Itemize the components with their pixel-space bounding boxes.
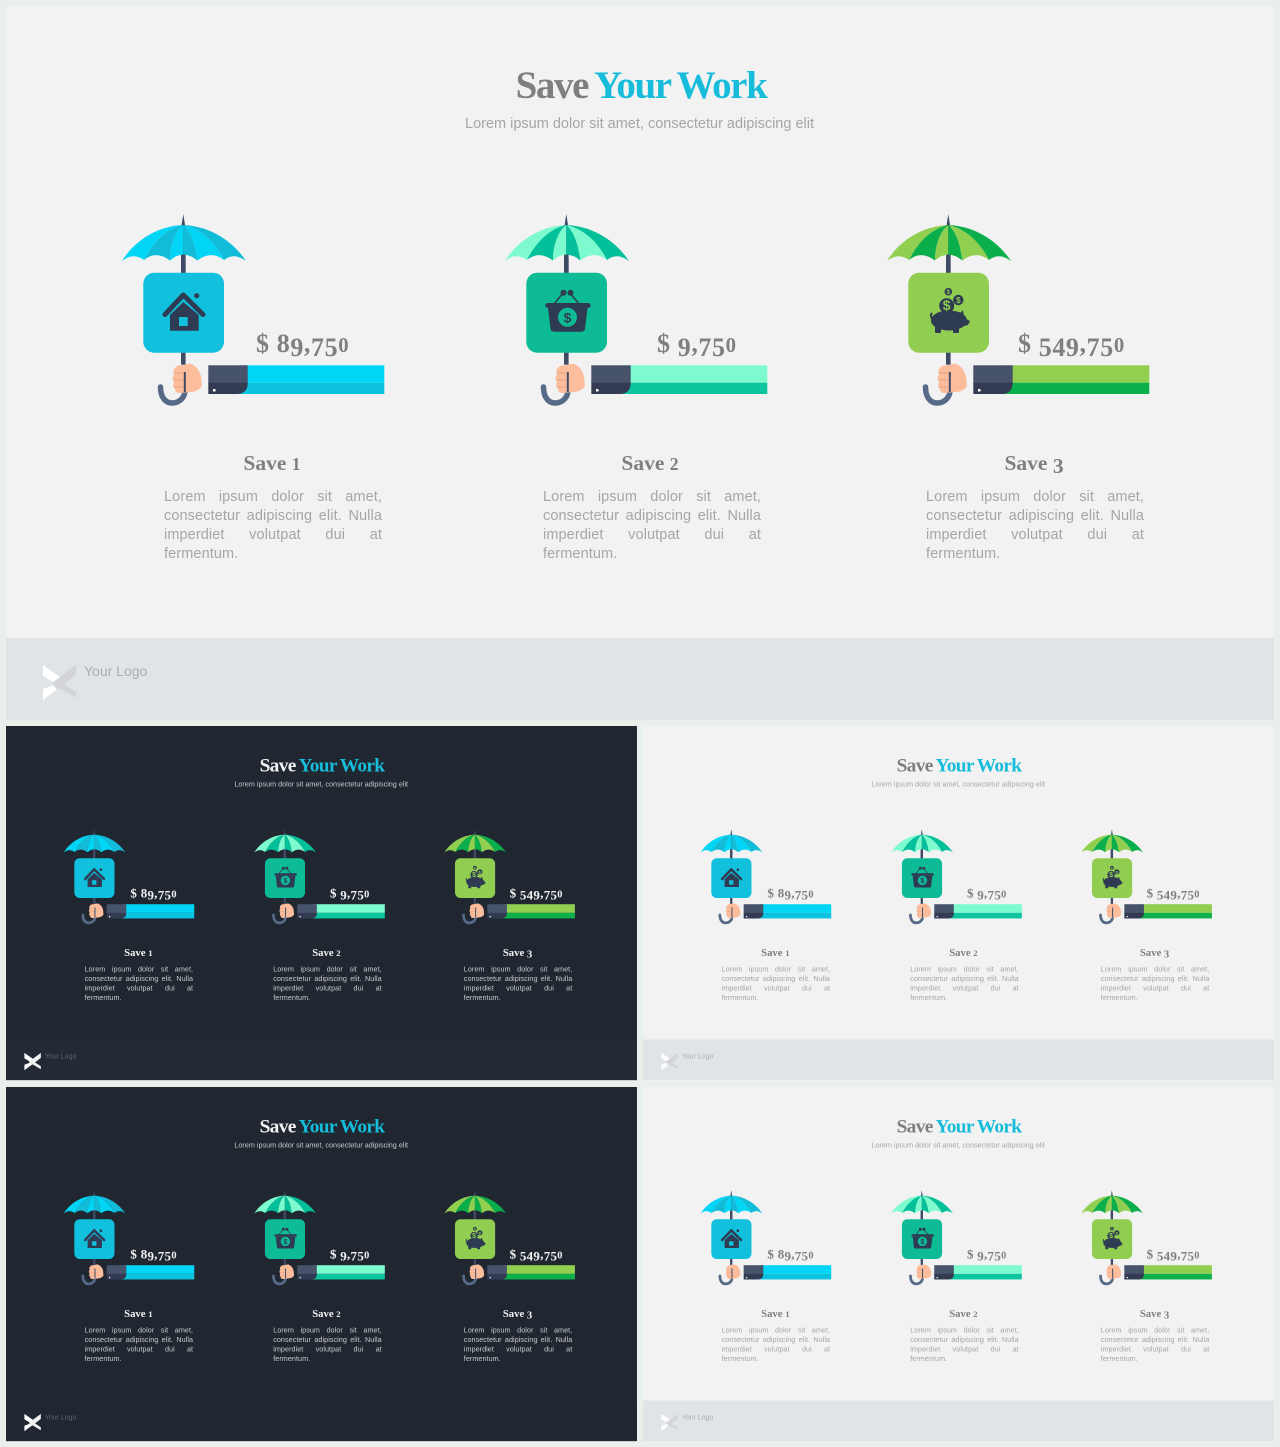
illustration: umbrella basket bbox=[251, 1188, 388, 1287]
text: save 2 bbox=[910, 965, 1019, 1002]
heading: save 2: Save 2 bbox=[621, 451, 679, 475]
footer band bbox=[643, 1400, 1274, 1441]
text: save 1: fermentum. bbox=[85, 994, 122, 1002]
subtitle: Lorem ipsum dolor sit amet, consectetur adipiscing elit bbox=[465, 116, 814, 132]
heading: save 3: Save 3 bbox=[503, 947, 532, 960]
value: save 2: $ 9,750 bbox=[330, 886, 370, 903]
text: save 1: consectetur adipiscing elit. Nulla bbox=[164, 508, 382, 524]
text: save 2: fermentum. bbox=[273, 994, 310, 1002]
text: save 3: Lorem ipsum dolor sit amet, bbox=[464, 1326, 572, 1334]
value: save 3: $ 549,750 bbox=[1018, 329, 1125, 362]
text: save 2: consectetur adipiscing elit. Nulla bbox=[910, 975, 1019, 983]
text: save 3: Lorem ipsum dolor sit amet, bbox=[1101, 965, 1209, 973]
value: save 2: $ 9,750 bbox=[330, 1247, 370, 1264]
text: save 1: fermentum. bbox=[164, 546, 238, 562]
icon: logo bbox=[661, 1052, 679, 1071]
logo text: Your Logo bbox=[84, 663, 147, 679]
illustration: umbrella piggy bank: $ bbox=[1116, 869, 1119, 874]
illustration: umbrella piggy bank bbox=[444, 830, 575, 924]
illustration: umbrella basket bbox=[891, 829, 1022, 924]
heading: save 2: Save 2 bbox=[312, 947, 341, 959]
panel: main light slide bbox=[6, 6, 1274, 720]
value: save 3: $ 549,750 bbox=[1147, 886, 1200, 903]
text: save 3: fermentum. bbox=[926, 546, 1000, 562]
illustration: umbrella piggy bank: $ bbox=[1111, 866, 1113, 870]
text: save 1: fermentum. bbox=[85, 1355, 122, 1363]
illustration: umbrella house bbox=[122, 214, 384, 406]
text: save 2: imperdiet volutpat dui at bbox=[543, 526, 761, 542]
value: save 2: $ 9,750 bbox=[967, 1247, 1007, 1264]
text: save 3 bbox=[464, 1326, 572, 1364]
illustration: umbrella piggy bank: $ bbox=[472, 872, 476, 879]
text: save 1: consectetur adipiscing elit. Nulla bbox=[722, 1336, 830, 1344]
text: save 3: Lorem ipsum dolor sit amet, bbox=[464, 965, 572, 973]
text: save 2: Lorem ipsum dolor sit amet, bbox=[273, 1326, 382, 1334]
icon: logo bbox=[24, 1413, 42, 1432]
value: save 1: $ 89,750 bbox=[256, 329, 349, 362]
text: save 3 bbox=[926, 488, 1144, 562]
panel: dark slide bottom bbox=[6, 1087, 637, 1441]
footer band bbox=[643, 1039, 1274, 1080]
text: save 2: imperdiet volutpat dui at bbox=[273, 984, 382, 992]
text: save 3: imperdiet volutpat dui at bbox=[1101, 1345, 1209, 1353]
text: save 3: consectetur adipiscing elit. Nulla bbox=[1101, 975, 1209, 983]
text: save 1 bbox=[84, 965, 193, 1002]
text: save 1: Lorem ipsum dolor sit amet, bbox=[85, 1326, 193, 1334]
text: save 3: imperdiet volutpat dui at bbox=[1101, 984, 1209, 992]
heading: save 2: Save 2 bbox=[949, 1308, 978, 1320]
subtitle: Lorem ipsum dolor sit amet, consectetur adipiscing elit bbox=[871, 1142, 1045, 1149]
panel: light slide top bbox=[643, 726, 1274, 1080]
text: save 3: Lorem ipsum dolor sit amet, bbox=[926, 488, 1144, 504]
illustration: umbrella piggy bank: $ bbox=[472, 1233, 476, 1240]
illustration: umbrella piggy bank: $ bbox=[479, 869, 482, 874]
heading: save 3: Save 3 bbox=[1140, 947, 1169, 960]
heading: Save Your Work bbox=[260, 755, 384, 776]
text: save 1: consectetur adipiscing elit. Nulla bbox=[85, 1336, 193, 1344]
text: save 1: Lorem ipsum dolor sit amet, bbox=[85, 965, 193, 973]
illustration: umbrella basket bbox=[505, 214, 768, 406]
heading: Save Your Work bbox=[897, 755, 1021, 776]
text: save 3: imperdiet volutpat dui at bbox=[464, 1345, 572, 1353]
value: save 3: $ 549,750 bbox=[510, 1247, 563, 1264]
heading: Save Your Work bbox=[516, 64, 766, 106]
text: save 3: consectetur adipiscing elit. Nulla bbox=[926, 508, 1144, 524]
heading: save 2: Save 2 bbox=[312, 1308, 341, 1320]
text: save 2: consectetur adipiscing elit. Nulla bbox=[273, 1336, 382, 1344]
text: save 2: consectetur adipiscing elit. Nulla bbox=[910, 1336, 1019, 1344]
text: save 1: Lorem ipsum dolor sit amet, bbox=[722, 965, 830, 973]
heading: save 1: Save 1 bbox=[243, 451, 301, 475]
logo text: Your Logo bbox=[682, 1052, 713, 1060]
text: save 2 bbox=[910, 1326, 1019, 1364]
illustration: umbrella piggy bank: $ bbox=[479, 1230, 482, 1235]
text: save 1: consectetur adipiscing elit. Nulla bbox=[85, 975, 193, 983]
footer band bbox=[6, 1400, 637, 1441]
illustration: umbrella piggy bank bbox=[887, 214, 1150, 406]
text: save 2: Lorem ipsum dolor sit amet, bbox=[273, 965, 382, 973]
text: save 1: Lorem ipsum dolor sit amet, bbox=[164, 488, 382, 504]
text: save 1: Lorem ipsum dolor sit amet, bbox=[722, 1326, 830, 1334]
text: save 3: consectetur adipiscing elit. Nulla bbox=[464, 975, 572, 983]
heading: save 3: Save 3 bbox=[1004, 451, 1064, 478]
illustration: umbrella basket: $ bbox=[283, 1239, 287, 1246]
value: save 1: $ 89,750 bbox=[130, 1247, 177, 1264]
illustration: umbrella basket: $ bbox=[920, 1239, 924, 1246]
illustration: umbrella basket bbox=[888, 1188, 1025, 1287]
illustration: umbrella basket: $ bbox=[283, 878, 287, 885]
text: save 1: imperdiet volutpat dui at bbox=[85, 1345, 193, 1353]
heading: save 3: Save 3 bbox=[1140, 1308, 1169, 1321]
heading: Save Your Work bbox=[897, 1116, 1021, 1137]
text: save 1: imperdiet volutpat dui at bbox=[85, 984, 193, 992]
icon: logo bbox=[661, 1413, 679, 1432]
illustration: umbrella piggy bank: $ bbox=[943, 297, 951, 313]
logo text: Your Logo bbox=[45, 1413, 76, 1421]
value: save 3: $ 549,750 bbox=[1147, 1247, 1200, 1264]
illustration: umbrella piggy bank bbox=[1082, 829, 1212, 924]
text: save 3: consectetur adipiscing elit. Nulla bbox=[464, 1336, 572, 1344]
panel: light slide bottom bbox=[643, 1087, 1274, 1441]
text: save 1 bbox=[85, 1326, 193, 1364]
illustration: umbrella piggy bank bbox=[441, 1188, 578, 1287]
illustration: umbrella piggy bank: $ bbox=[1109, 1233, 1113, 1240]
heading: save 2: Save 2 bbox=[949, 947, 978, 959]
text: save 3: imperdiet volutpat dui at bbox=[464, 984, 572, 992]
text: save 1: imperdiet volutpat dui at bbox=[722, 1345, 830, 1353]
text: save 1: imperdiet volutpat dui at bbox=[164, 526, 382, 542]
value: save 1: $ 89,750 bbox=[767, 886, 814, 903]
logo text: Your Logo bbox=[682, 1413, 713, 1421]
value: save 2: $ 9,750 bbox=[967, 886, 1007, 903]
illustration: umbrella basket bbox=[254, 830, 385, 924]
text: save 2: consectetur adipiscing elit. Nulla bbox=[543, 508, 761, 524]
illustration: umbrella piggy bank: $ bbox=[1116, 1230, 1119, 1235]
text: save 2: imperdiet volutpat dui at bbox=[273, 1345, 382, 1353]
text: save 3: Lorem ipsum dolor sit amet, bbox=[1101, 1326, 1209, 1334]
text: save 1 bbox=[164, 488, 382, 562]
subtitle: Lorem ipsum dolor sit amet, consectetur adipiscing elit bbox=[234, 1142, 408, 1149]
text: save 1 bbox=[722, 965, 830, 1002]
illustration: umbrella house bbox=[700, 829, 832, 924]
logo text: Your Logo bbox=[45, 1052, 76, 1060]
text: save 1: imperdiet volutpat dui at bbox=[722, 984, 830, 992]
illustration: umbrella piggy bank: $ bbox=[1111, 1227, 1113, 1231]
footer band bbox=[6, 638, 1274, 720]
heading: save 1: Save 1 bbox=[761, 947, 790, 959]
text: save 3: fermentum. bbox=[464, 1355, 501, 1363]
text: save 2 bbox=[273, 965, 382, 1002]
text: save 2: Lorem ipsum dolor sit amet, bbox=[910, 1326, 1019, 1334]
illustration: umbrella piggy bank: $ bbox=[474, 1227, 476, 1231]
illustration: umbrella house bbox=[60, 1188, 197, 1287]
text: save 2: imperdiet volutpat dui at bbox=[910, 1345, 1019, 1353]
panel: dark slide top bbox=[6, 726, 637, 1080]
heading: Save Your Work bbox=[260, 1116, 384, 1137]
text: save 3: consectetur adipiscing elit. Nulla bbox=[1101, 1336, 1209, 1344]
text: save 2: Lorem ipsum dolor sit amet, bbox=[543, 488, 761, 504]
text: save 1 bbox=[722, 1326, 830, 1364]
text: save 3: fermentum. bbox=[1101, 994, 1138, 1002]
text: save 3 bbox=[1101, 1326, 1209, 1364]
heading: save 1: Save 1 bbox=[124, 947, 153, 959]
illustration: umbrella piggy bank: $ bbox=[956, 296, 961, 305]
text: save 2 bbox=[273, 1326, 382, 1364]
illustration: umbrella basket: $ bbox=[920, 878, 924, 885]
text: save 2: Lorem ipsum dolor sit amet, bbox=[910, 965, 1019, 973]
value: save 2: $ 9,750 bbox=[657, 329, 737, 362]
text: save 2: imperdiet volutpat dui at bbox=[910, 984, 1019, 992]
text: save 3 bbox=[464, 965, 572, 1002]
text: save 2: fermentum. bbox=[543, 546, 617, 562]
text: save 3 bbox=[1101, 965, 1209, 1003]
heading: save 3: Save 3 bbox=[503, 1308, 532, 1321]
text: save 2 bbox=[543, 488, 761, 562]
illustration: umbrella piggy bank: $ bbox=[947, 290, 951, 296]
illustration: umbrella piggy bank bbox=[1078, 1188, 1215, 1287]
footer band bbox=[6, 1039, 637, 1080]
text: save 1: consectetur adipiscing elit. Nulla bbox=[722, 975, 830, 983]
illustration: umbrella piggy bank: $ bbox=[1109, 872, 1113, 879]
value: save 1: $ 89,750 bbox=[767, 1247, 814, 1264]
text: save 3: fermentum. bbox=[464, 994, 501, 1002]
text: save 1: fermentum. bbox=[722, 994, 759, 1002]
illustration: umbrella house bbox=[64, 830, 194, 924]
text: save 3: fermentum. bbox=[1101, 1355, 1138, 1363]
text: save 2: fermentum. bbox=[273, 1355, 310, 1363]
text: save 2: fermentum. bbox=[910, 994, 947, 1002]
subtitle: Lorem ipsum dolor sit amet, consectetur adipiscing elit bbox=[234, 781, 408, 788]
text: save 1: fermentum. bbox=[722, 1355, 759, 1363]
heading: save 1: Save 1 bbox=[761, 1308, 790, 1320]
value: save 1: $ 89,750 bbox=[130, 886, 177, 903]
text: save 2: fermentum. bbox=[910, 1355, 947, 1363]
illustration: umbrella piggy bank: $ bbox=[474, 866, 476, 870]
icon: logo bbox=[43, 665, 76, 700]
heading: save 1: Save 1 bbox=[124, 1308, 153, 1320]
text: save 2: consectetur adipiscing elit. Nulla bbox=[273, 975, 382, 983]
icon: logo bbox=[24, 1052, 41, 1070]
subtitle: Lorem ipsum dolor sit amet, consectetur adipiscing elit bbox=[871, 781, 1045, 788]
illustration: umbrella house bbox=[697, 1188, 834, 1287]
text: save 3: imperdiet volutpat dui at bbox=[926, 526, 1144, 542]
illustration: umbrella basket: $ bbox=[563, 310, 571, 326]
value: save 3: $ 549,750 bbox=[510, 886, 563, 903]
